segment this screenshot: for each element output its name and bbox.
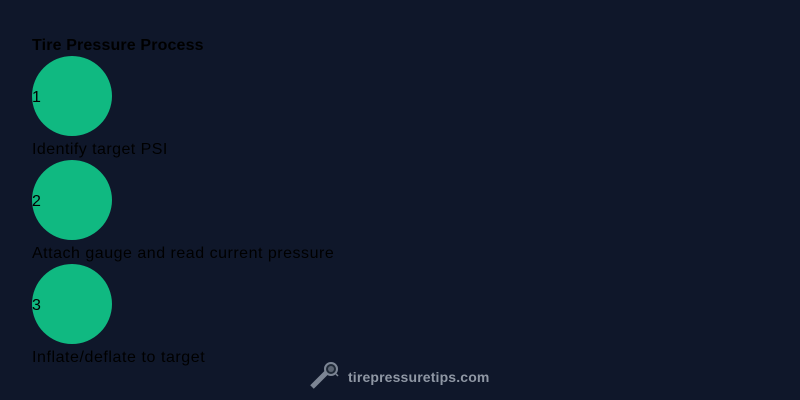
step 3 number: 3 xyxy=(32,297,41,314)
footer website text: tirepressuretips.com xyxy=(348,369,490,385)
step 2 number: 2 xyxy=(32,193,41,210)
step 1 circle xyxy=(32,56,112,136)
step 1 label: Identify target PSI xyxy=(32,141,168,158)
step 1 number: 1 xyxy=(32,89,41,106)
title: Tire Pressure Process xyxy=(32,37,204,54)
step 3 label: Inflate/deflate to target xyxy=(32,349,205,366)
footer icon: tire gauge magnifier xyxy=(310,362,338,389)
step 3 circle xyxy=(32,264,112,344)
step 2 label: Attach gauge and read current pressure xyxy=(32,245,334,262)
step 2 circle xyxy=(32,160,112,240)
